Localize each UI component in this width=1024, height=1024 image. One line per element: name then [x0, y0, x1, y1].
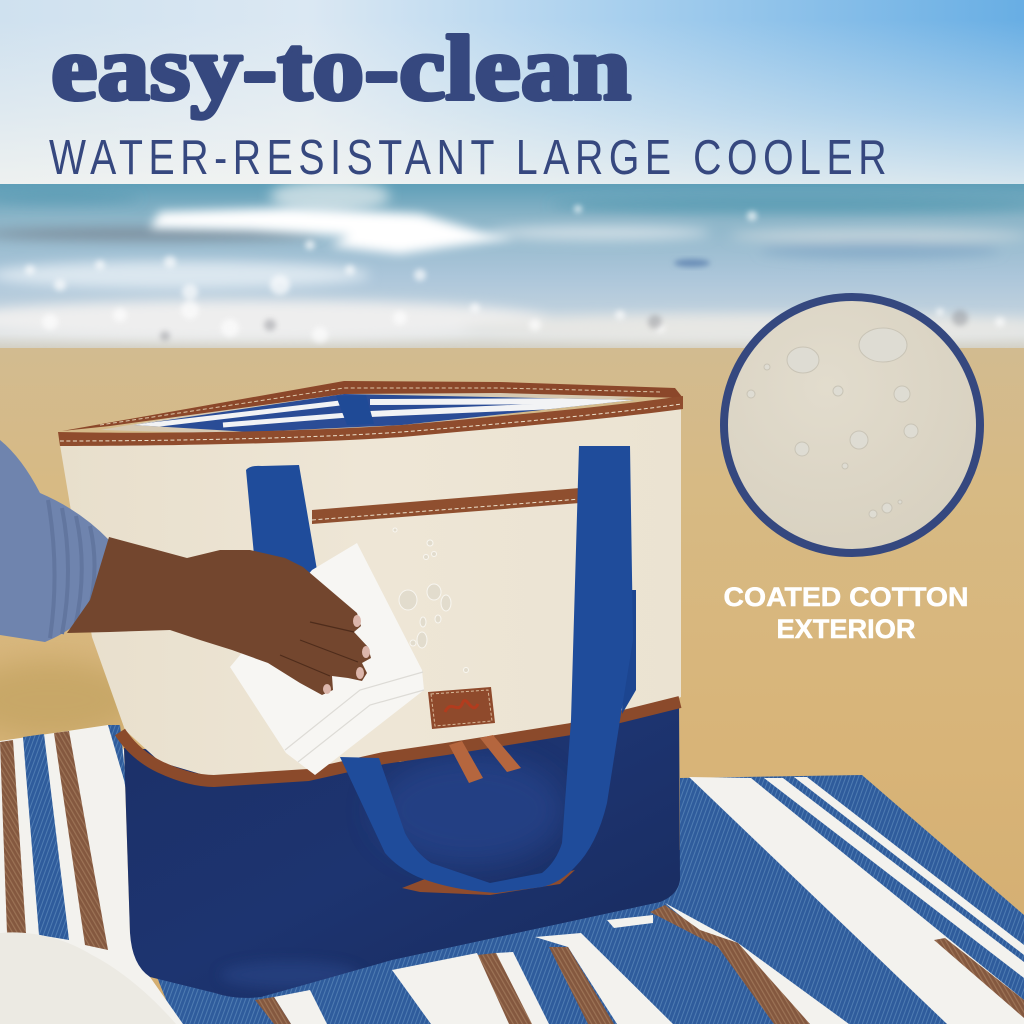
- bag: brown zipper band: [120, 702, 680, 781]
- bag: front pocket trim: [312, 488, 580, 524]
- background: sky: [0, 0, 1024, 190]
- title: easy-to-clean: [51, 17, 631, 119]
- sparkles: [25, 205, 1005, 343]
- inset caption: COATED COTTON: [724, 582, 968, 612]
- cooler bag: [58, 381, 683, 998]
- bag: zipper pulls: [449, 735, 521, 783]
- inset caption: [724, 582, 968, 644]
- bag: back brown rim: [62, 381, 683, 431]
- hand wiping: [67, 537, 371, 695]
- bag: navy sheen: [220, 755, 565, 989]
- bag: right strap: [340, 446, 633, 893]
- bag: back rim stitching: [100, 388, 660, 425]
- sand: darker foreground patch: [0, 660, 140, 740]
- bag: rim stitching: [60, 404, 682, 441]
- nails: [323, 615, 370, 694]
- bag: front brown rim: [58, 396, 683, 446]
- bag: strap bottom leather tab: [402, 870, 575, 895]
- inset caption: EXTERIOR: [776, 614, 916, 644]
- bag: striped interior lining: [134, 394, 634, 432]
- blanket: right section: [150, 775, 1024, 1024]
- bag: lower navy compartment: [124, 700, 680, 998]
- bag: right strap back strand: [622, 590, 636, 714]
- bag: left strap: [246, 465, 317, 590]
- bag: pocket stitching: [312, 499, 580, 520]
- background: horizon haze: [0, 20, 1024, 190]
- subtitle: WATER-RESISTANT LARGE COOLER: [49, 131, 887, 185]
- background: sand: [0, 348, 1024, 1024]
- inset circle: coated cotton closeup: [724, 297, 980, 553]
- bag: interior navy tab: [336, 395, 374, 425]
- sweater sleeve: [0, 440, 110, 642]
- blanket: left section: [0, 725, 183, 1024]
- blanket: white fold in corner: [0, 932, 176, 1024]
- droplets in inset: [747, 328, 918, 518]
- bag: leather logo patch: [428, 687, 495, 729]
- water droplets on bag: [393, 528, 468, 672]
- bag: canvas body: [60, 408, 681, 778]
- bag: interior: [100, 388, 670, 434]
- paper towel: [230, 543, 424, 775]
- background: sea: [0, 180, 1024, 354]
